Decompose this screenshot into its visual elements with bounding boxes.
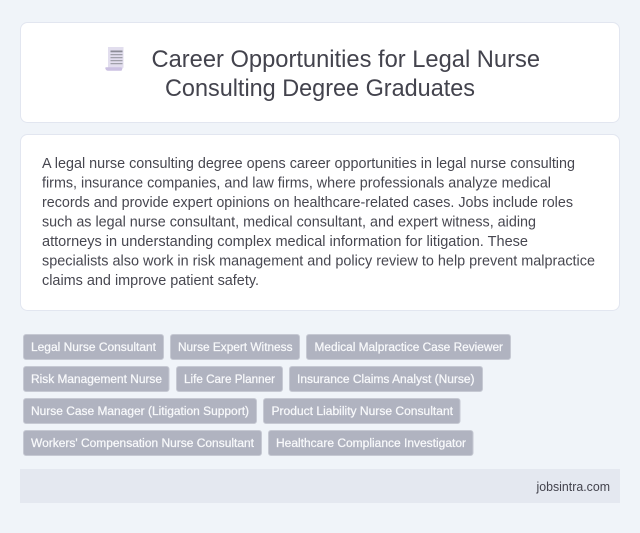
tag (176, 366, 282, 392)
tag: Nurse Case Manager (Litigation Support) (31, 404, 249, 418)
title: Career Opportunities for Legal Nurse (152, 46, 540, 73)
text block: description: records and provide expert opinions on healthcare-related cases. Jobs include roles (42, 195, 573, 211)
tags: job roles (24, 334, 510, 456)
tag (264, 398, 460, 424)
panel: header (20, 22, 620, 122)
tag: Medical Malpractice Case Reviewer (314, 340, 503, 354)
tag (24, 430, 262, 456)
text block: description: firms, insurance companies, and law firms, where professionals analyze medical (42, 176, 551, 192)
tag (24, 366, 169, 392)
tag (24, 398, 256, 424)
tag (306, 334, 510, 360)
text block: description: such as legal nurse consultant, medical consultant, and expert witness, aiding (42, 214, 536, 230)
icon: document scroll (105, 47, 124, 71)
tag: Workers' Compensation Nurse Consultant (31, 436, 255, 450)
tag (290, 366, 482, 392)
tag: Life Care Planner (184, 372, 275, 386)
footer: jobsintra.com (536, 480, 610, 494)
text block: description: claims and improve patient safety. (42, 273, 259, 289)
tag (24, 334, 164, 360)
tag (268, 430, 473, 456)
text block: description (42, 156, 595, 289)
text block: description: A legal nurse consulting degree opens career opportunities in legal nurse consulting (42, 156, 575, 172)
tag: Insurance Claims Analyst (Nurse) (297, 372, 474, 386)
tag: Healthcare Compliance Investigator (276, 436, 466, 450)
tag: Nurse Expert Witness (178, 340, 292, 354)
tag: Legal Nurse Consultant (31, 340, 157, 354)
title (152, 46, 540, 102)
tag (170, 334, 300, 360)
text block: description: specialists also work in risk management and policy review to help prevent malpractice (42, 254, 595, 270)
text block: description: attorneys in understanding complex medical information for litigation. These (42, 234, 528, 250)
tag: Product Liability Nurse Consultant (272, 404, 454, 418)
tag: Risk Management Nurse (31, 372, 162, 386)
panel: description (20, 134, 620, 310)
footer (20, 469, 620, 503)
title: Consulting Degree Graduates (165, 75, 475, 102)
